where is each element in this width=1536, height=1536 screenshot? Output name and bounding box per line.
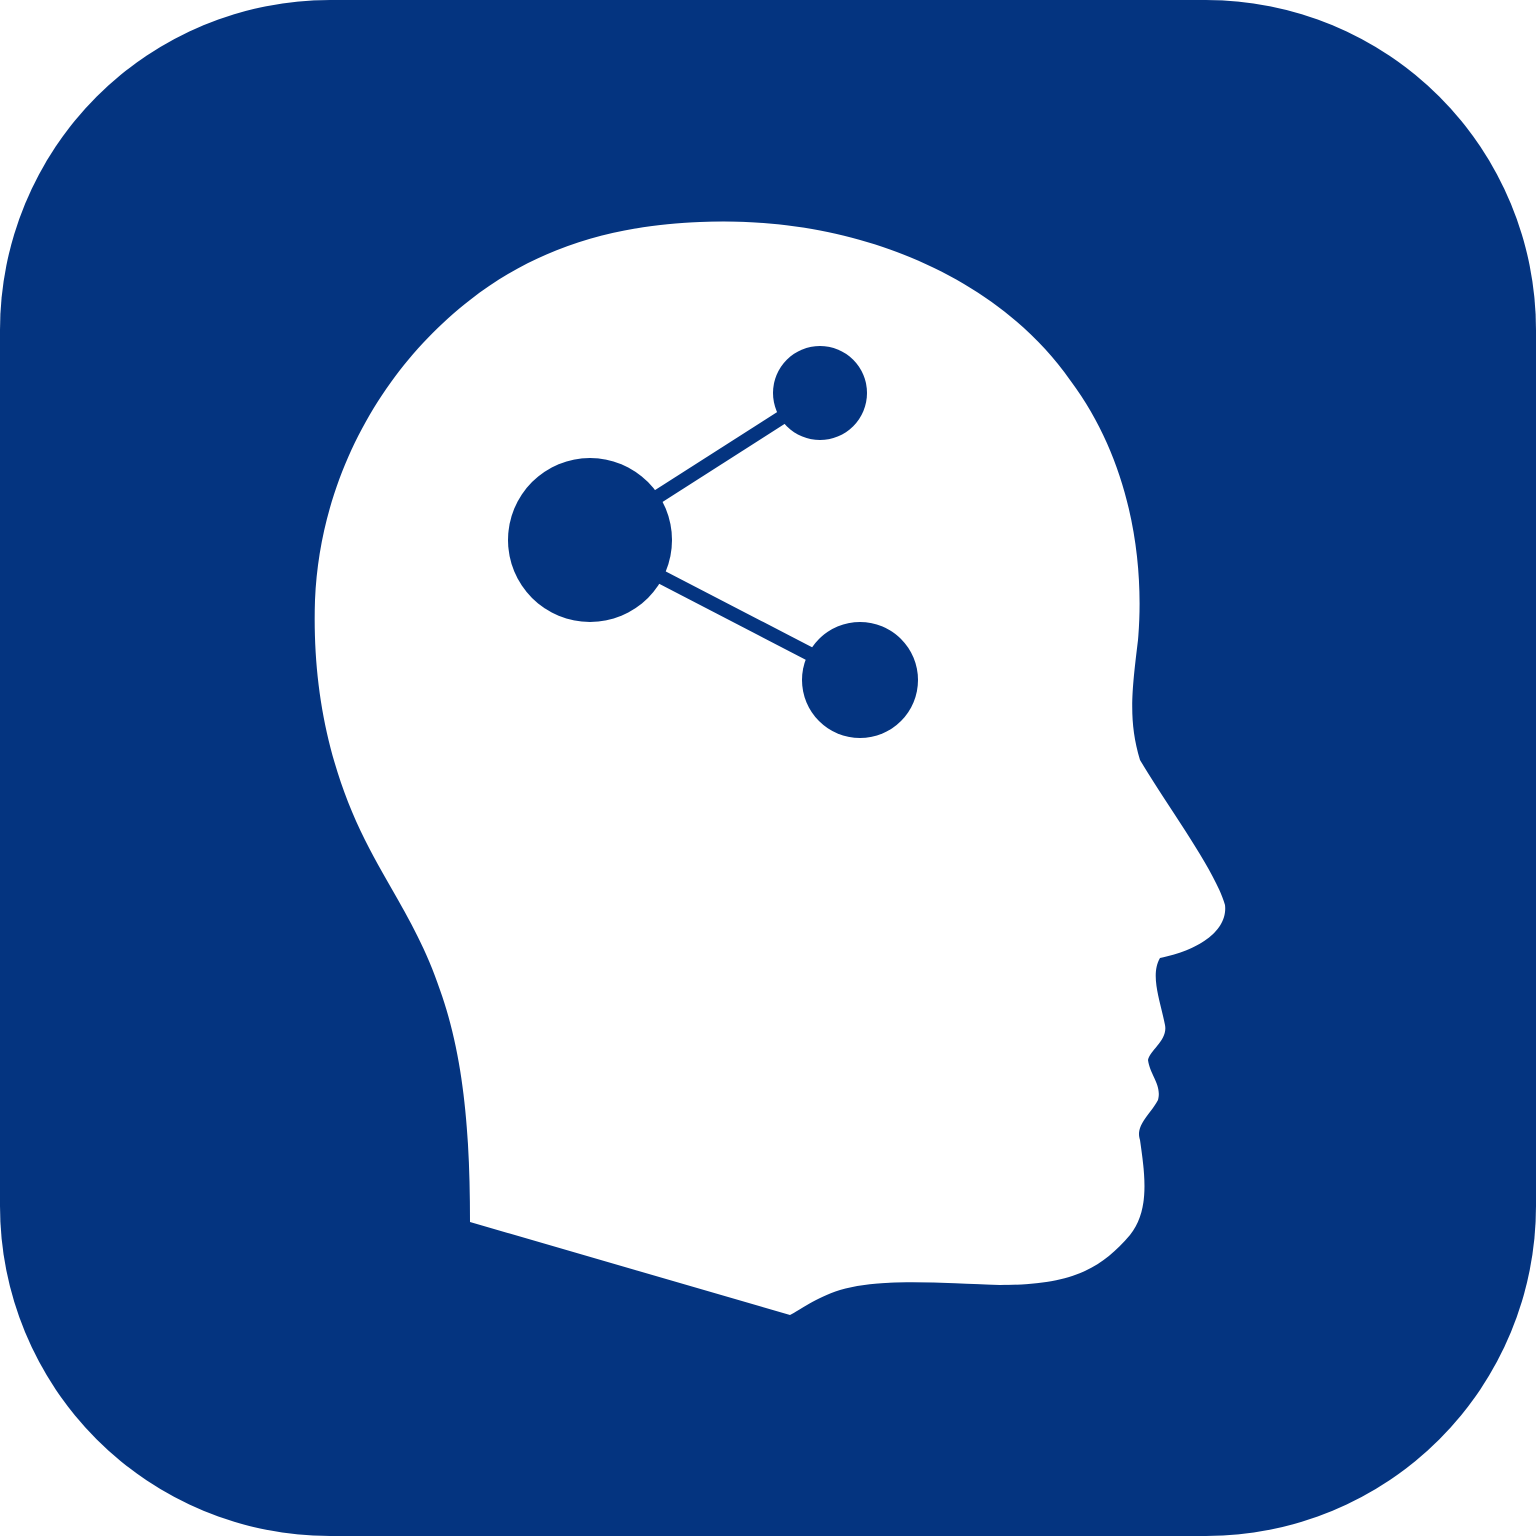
head silhouette <box>315 221 1225 1315</box>
icon: share network <box>508 346 918 738</box>
